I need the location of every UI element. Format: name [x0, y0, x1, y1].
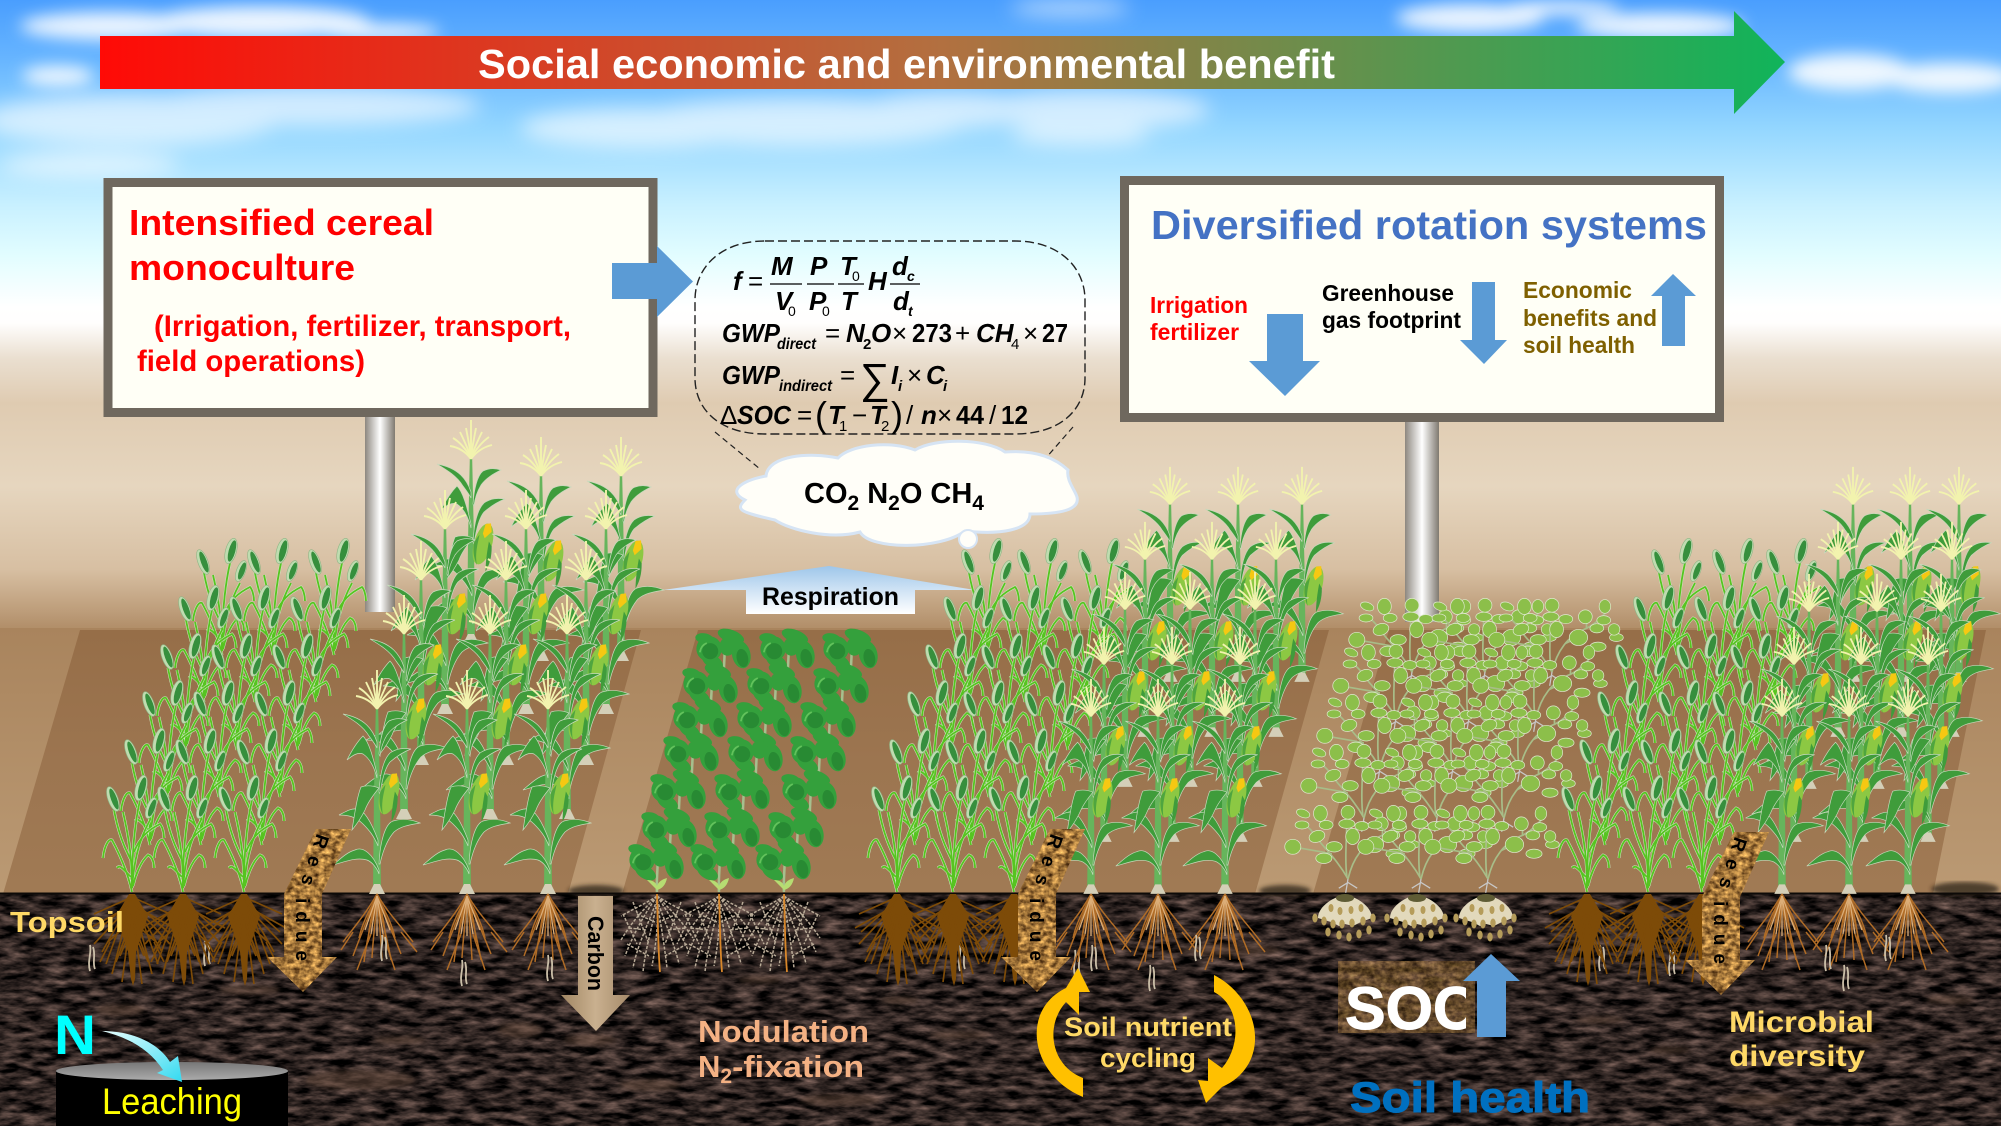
formula: flux: 0: [852, 268, 860, 284]
economic benefits label: soil health: [1523, 332, 1635, 358]
nutrient cycling label: [1064, 1012, 1232, 1073]
gas formulas: 2: [888, 492, 900, 515]
inputs list: (Irrigation, fertilizer, transport,: [154, 310, 571, 343]
arrow: benefits up: [1651, 274, 1696, 346]
residue arrow 3: [1685, 832, 1769, 995]
greenhouse gas footprint label: [1322, 280, 1461, 333]
formula: soil organic carbon change: /: [906, 400, 914, 430]
residue arrow 1: idue: [291, 898, 312, 969]
formula: soil organic carbon change: ): [891, 394, 903, 435]
formula: indirect GWP: ×: [907, 360, 922, 390]
formula: flux: H: [868, 266, 888, 296]
formula: flux: c: [907, 268, 915, 284]
roots under soybean: [621, 894, 820, 972]
formula: direct GWP: =: [825, 318, 840, 348]
roots under wheat group 2: [855, 894, 1080, 986]
nutrient cycling label: Soil nutrient: [1064, 1012, 1232, 1042]
formula: indirect GWP: ∑: [860, 355, 890, 402]
nutrient cycling arrows: [1037, 968, 1255, 1103]
nodulation label: 2: [720, 1065, 732, 1088]
carbon label: Carbon: [583, 916, 608, 991]
inputs list: field operations): [137, 345, 365, 378]
formula: indirect GWP: I: [891, 360, 899, 390]
residue arrow 2: idue: [1025, 898, 1046, 969]
formula: flux: M: [771, 251, 794, 281]
roots under maize group 3: [1746, 894, 1948, 991]
formula: direct GWP: GWP: [722, 318, 781, 348]
sky and horizon background: [0, 0, 2001, 896]
formula: soil organic carbon change: 12: [1001, 400, 1028, 430]
benefit gradient arrow: [100, 11, 1785, 114]
formula: soil organic carbon change: [720, 394, 1028, 435]
microbial diversity label: [1729, 1006, 1874, 1073]
formula: flux: P: [810, 251, 828, 281]
formula: soil organic carbon change: 44: [956, 400, 985, 430]
formula: flux: f: [733, 266, 744, 296]
gas formulas: 4: [972, 492, 984, 515]
formula: direct GWP: N: [846, 318, 866, 348]
formula: soil organic carbon change: =: [797, 400, 812, 430]
microbial diversity label: Microbial: [1729, 1006, 1874, 1039]
benefit arrow title: Social economic and environmental benefit: [478, 41, 1335, 87]
formula thought bubble: [695, 241, 1085, 469]
panel: intensified cereal monoculture: [108, 182, 653, 412]
sign posts: [365, 417, 1439, 622]
clover plots: [1285, 598, 1623, 893]
formula: indirect GWP: indirect: [779, 378, 833, 395]
formula: direct GWP: 2: [863, 336, 871, 353]
wheat group 2: [868, 537, 1136, 892]
maize group 3: [1740, 467, 2000, 894]
arrow: monoculture to formulas: [612, 246, 693, 317]
formula: soil organic carbon change: n: [921, 400, 937, 430]
formula: direct GWP: ×: [892, 318, 907, 348]
roots under maize group 2: [1055, 894, 1265, 991]
formula: soil organic carbon change: T: [870, 400, 888, 430]
residue arrow 1: Res: [293, 831, 332, 897]
gas formulas: CH: [930, 478, 972, 510]
formula: direct GWP: 273: [912, 318, 952, 348]
soil health label: Soil health: [1350, 1074, 1590, 1122]
formula: soil organic carbon change: 1: [839, 418, 847, 435]
gas formulas: CO: [804, 478, 848, 510]
formula: direct GWP: 4: [1011, 336, 1019, 353]
greenhouse gas footprint label: gas footprint: [1322, 307, 1461, 333]
nodulation label: -fixation: [732, 1049, 864, 1084]
gas formulas: N: [867, 478, 888, 510]
wheat group 1: [103, 537, 366, 892]
soybean plots: [627, 626, 880, 892]
arrow: SOC up: [1463, 954, 1520, 1037]
residue arrow 3: Res: [1711, 834, 1750, 900]
formula: flux: T: [840, 251, 858, 281]
formula: flux: 0: [788, 303, 796, 319]
economic benefits label: Economic: [1523, 277, 1632, 303]
formula: direct GWP: ×: [1023, 318, 1038, 348]
heading: intensified cereal monoculture: Intensified cereal: [129, 202, 434, 243]
formula: indirect GWP: GWP: [722, 360, 781, 390]
heading: diversified rotation systems: Diversified rotation systems: [1151, 202, 1707, 248]
formula: indirect GWP: [722, 355, 948, 402]
respiration label: Respiration: [762, 583, 899, 611]
greenhouse gas footprint label: Greenhouse: [1322, 280, 1454, 306]
topsoil label: Topsoil: [10, 907, 124, 939]
formula: flux: d: [893, 286, 910, 316]
formula: flux: T: [841, 286, 859, 316]
formula: soil organic carbon change: T: [828, 400, 846, 430]
maize group 2: [1049, 467, 1343, 894]
formula: flux: d: [892, 251, 909, 281]
economic benefits label: [1523, 277, 1657, 358]
formula: direct GWP: CH: [976, 318, 1015, 348]
formula: flux: [733, 251, 920, 319]
wheat group 3: [1558, 537, 1824, 892]
formula: indirect GWP: C: [926, 360, 946, 390]
nodulation label: N: [698, 1049, 720, 1084]
arrow: irrigation down: [1249, 314, 1320, 396]
formula: direct GWP: O: [871, 318, 891, 348]
formula: direct GWP: direct: [777, 336, 817, 353]
roots under wheat group 3: [1545, 894, 1744, 986]
SOC label: SOC: [1345, 975, 1477, 1042]
formula: soil organic carbon change: SOC: [737, 400, 792, 430]
maize group 1: [333, 420, 664, 894]
clouds: [0, 0, 2001, 177]
microbial diversity label: diversity: [1729, 1040, 1865, 1073]
formula: flux: 0: [822, 303, 830, 319]
inputs list: [137, 310, 571, 378]
heading: intensified cereal monoculture: [129, 202, 434, 288]
formula: flux: t: [908, 303, 914, 319]
formula: indirect GWP: =: [840, 360, 855, 390]
soil organic carbon patch: [1338, 954, 1520, 1042]
carbon arrow: [561, 896, 630, 1031]
nodulation label: Nodulation: [698, 1014, 869, 1049]
formula: flux: =: [748, 266, 763, 296]
field plots: [3, 630, 1986, 894]
formula: direct GWP: 27: [1042, 318, 1068, 348]
formula: soil organic carbon change: 2: [881, 418, 889, 435]
formula: direct GWP: +: [955, 318, 970, 348]
gas formulas: O: [900, 478, 922, 510]
nodulation label: [698, 1014, 869, 1088]
leaching bucket: [54, 1003, 288, 1126]
formula: soil organic carbon change: −: [852, 400, 867, 430]
residue arrow 1: [267, 829, 351, 992]
greenhouse gas cloud: [737, 441, 1077, 548]
residue arrow 2: Res: [1027, 831, 1066, 897]
roots under clover: [1312, 894, 1517, 942]
arrow: footprint down: [1460, 282, 1507, 364]
irrigation fertilizer label: [1150, 292, 1248, 345]
formula: soil organic carbon change: (: [815, 394, 827, 435]
formula: indirect GWP: i: [943, 378, 948, 395]
formula: soil organic carbon change: ×: [937, 400, 952, 430]
soil layer: [0, 882, 2001, 1126]
economic benefits label: benefits and: [1523, 305, 1657, 331]
formula: indirect GWP: i: [898, 378, 903, 395]
nitrogen symbol: N: [54, 1003, 96, 1066]
formula: soil organic carbon change: /: [989, 400, 997, 430]
irrigation fertilizer label: fertilizer: [1150, 319, 1239, 345]
leaching arrow: [102, 1031, 182, 1082]
formula: flux: V: [775, 286, 795, 316]
formula: direct GWP: [722, 318, 1068, 353]
roots under maize group 1: [341, 894, 588, 986]
roots under wheat group 1: [89, 894, 286, 986]
nutrient cycling label: cycling: [1100, 1043, 1196, 1073]
irrigation fertilizer label: Irrigation: [1150, 292, 1248, 318]
leaching label: Leaching: [102, 1081, 242, 1122]
respiration arrow: [663, 566, 975, 614]
residue arrow 3: idue: [1709, 901, 1730, 972]
formula: flux: P: [809, 286, 827, 316]
formula: soil organic carbon change: Δ: [720, 400, 737, 430]
gas formulas: 2: [848, 492, 859, 515]
residue arrow 2: [1001, 829, 1085, 992]
heading: intensified cereal monoculture: monoculture: [129, 247, 355, 288]
panel: diversified rotation systems: [1124, 180, 1720, 418]
